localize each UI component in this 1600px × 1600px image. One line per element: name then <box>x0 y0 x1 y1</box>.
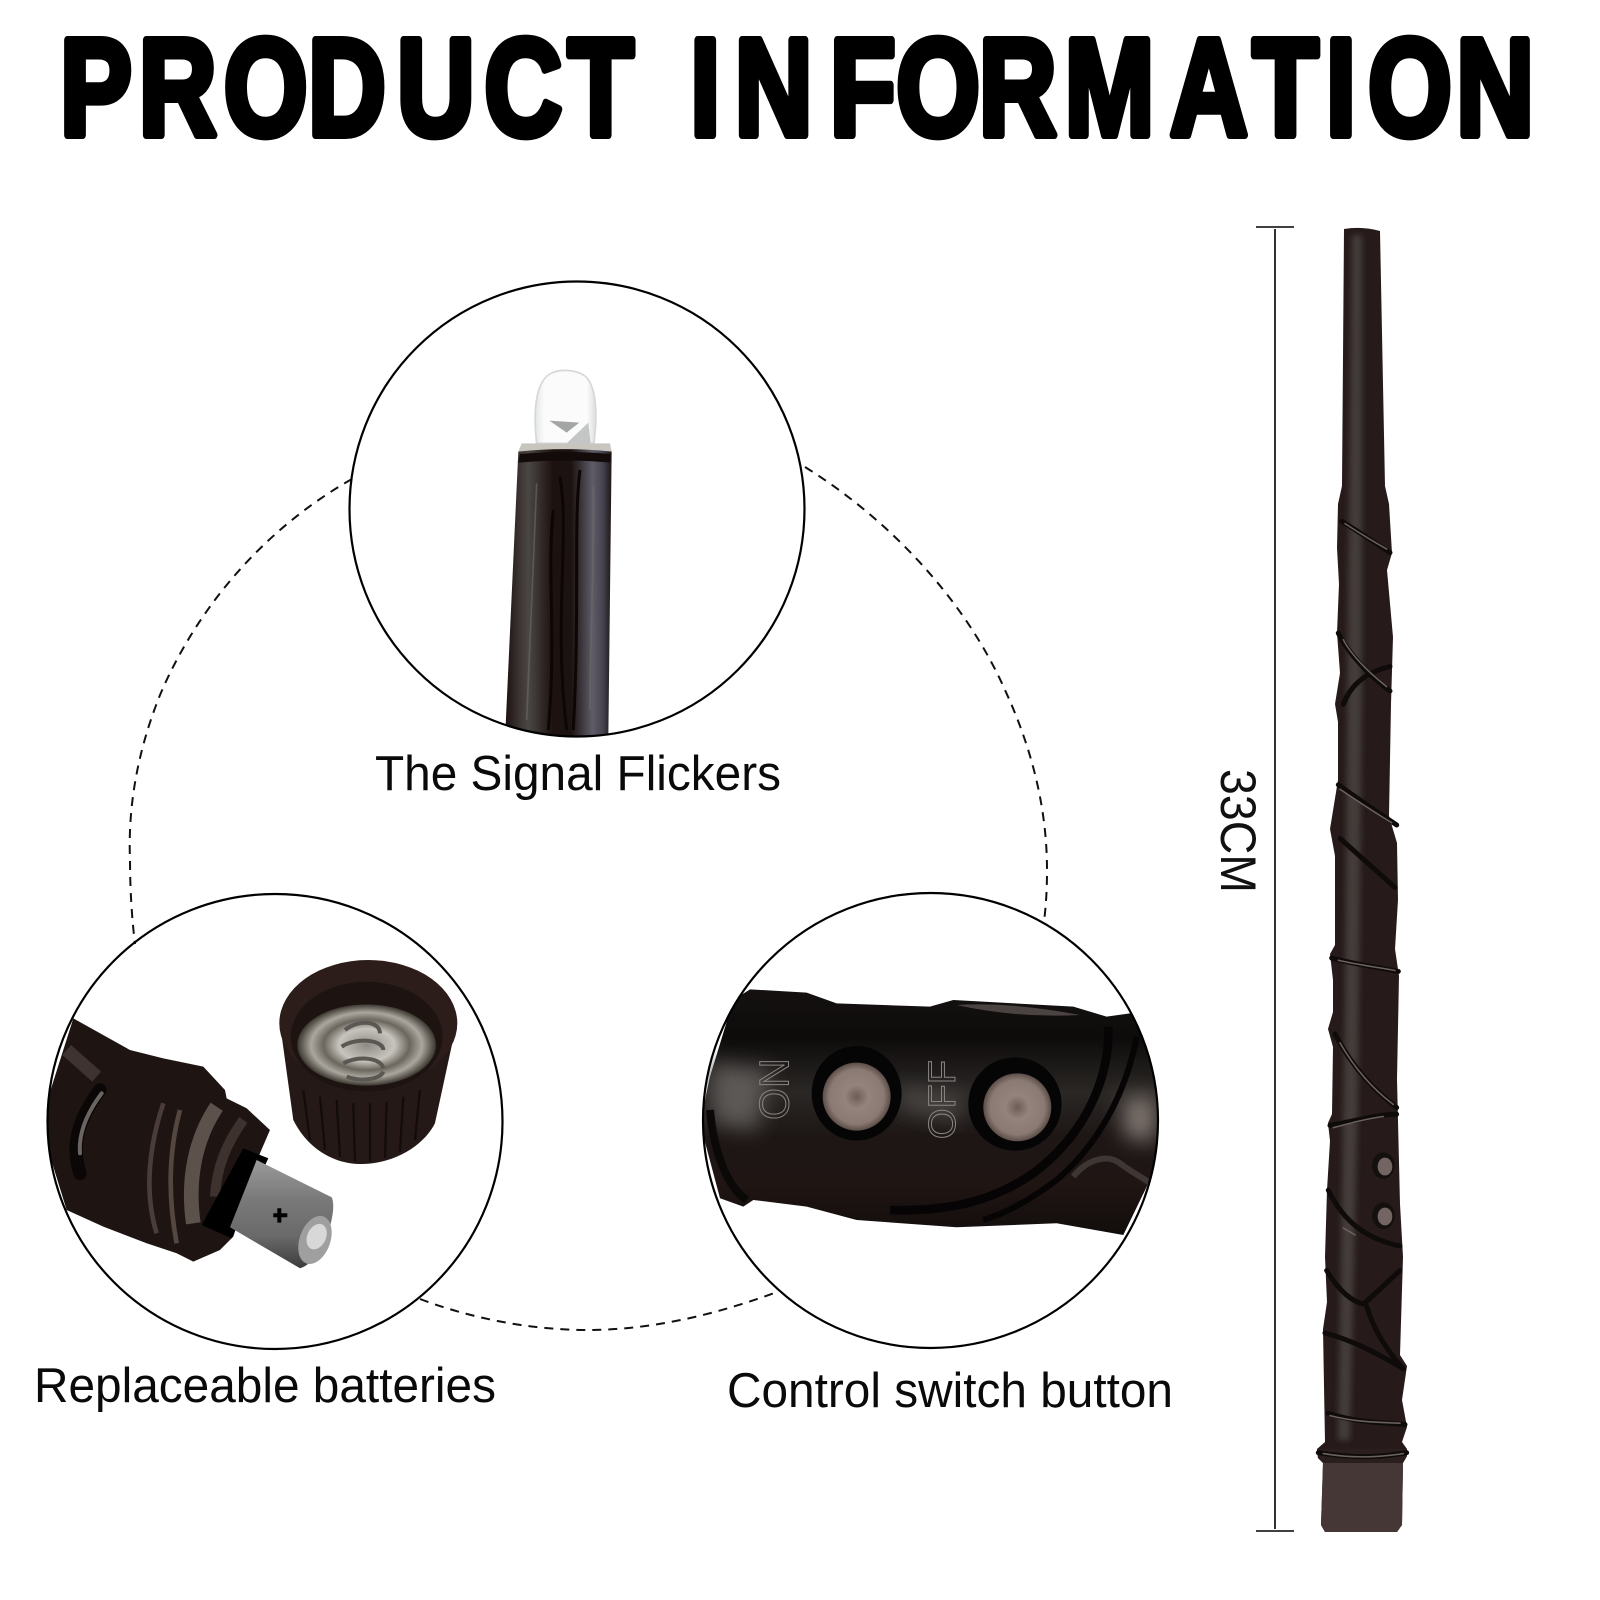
panel: control switch button <box>700 893 1173 1418</box>
panel: replaceable batteries <box>34 894 502 1413</box>
OFF button <box>968 1057 1062 1151</box>
ON button <box>812 1046 902 1141</box>
switch photo <box>700 989 1163 1235</box>
wand tip photo <box>505 370 612 740</box>
wand foot <box>1321 1463 1403 1532</box>
wand collar <box>1317 1449 1407 1463</box>
circle outline <box>703 893 1158 1348</box>
full wand photo <box>1317 228 1407 1532</box>
title: PRODUCT INFORMATION <box>60 11 1534 165</box>
dimension value: 33CM <box>1210 769 1266 893</box>
label: Control switch button <box>727 1364 1173 1418</box>
engraved ON: ON <box>750 1058 797 1120</box>
dimension line <box>1256 227 1294 1531</box>
battery compartment photo <box>40 960 457 1269</box>
label: The Signal Flickers <box>375 747 781 801</box>
circle outline <box>350 282 804 736</box>
length dimension <box>1210 227 1294 1531</box>
circle outline <box>48 894 502 1349</box>
vine <box>890 1027 1108 1210</box>
engraved OFF: OFF <box>921 1060 964 1139</box>
dashed connector ring <box>130 467 1047 1330</box>
wand body opened <box>40 1018 270 1262</box>
battery <box>230 1160 333 1268</box>
side button upper <box>1372 1152 1395 1179</box>
side button lower <box>1372 1202 1395 1229</box>
upper vines <box>1338 521 1397 887</box>
battery collar <box>202 1148 268 1238</box>
battery cap <box>280 1020 457 1164</box>
wand silhouette <box>1317 228 1407 1532</box>
wand shading <box>1338 235 1362 1440</box>
panel: the signal flickers <box>350 282 804 801</box>
label: Replaceable batteries <box>34 1359 496 1413</box>
lower vines <box>1318 958 1407 1457</box>
